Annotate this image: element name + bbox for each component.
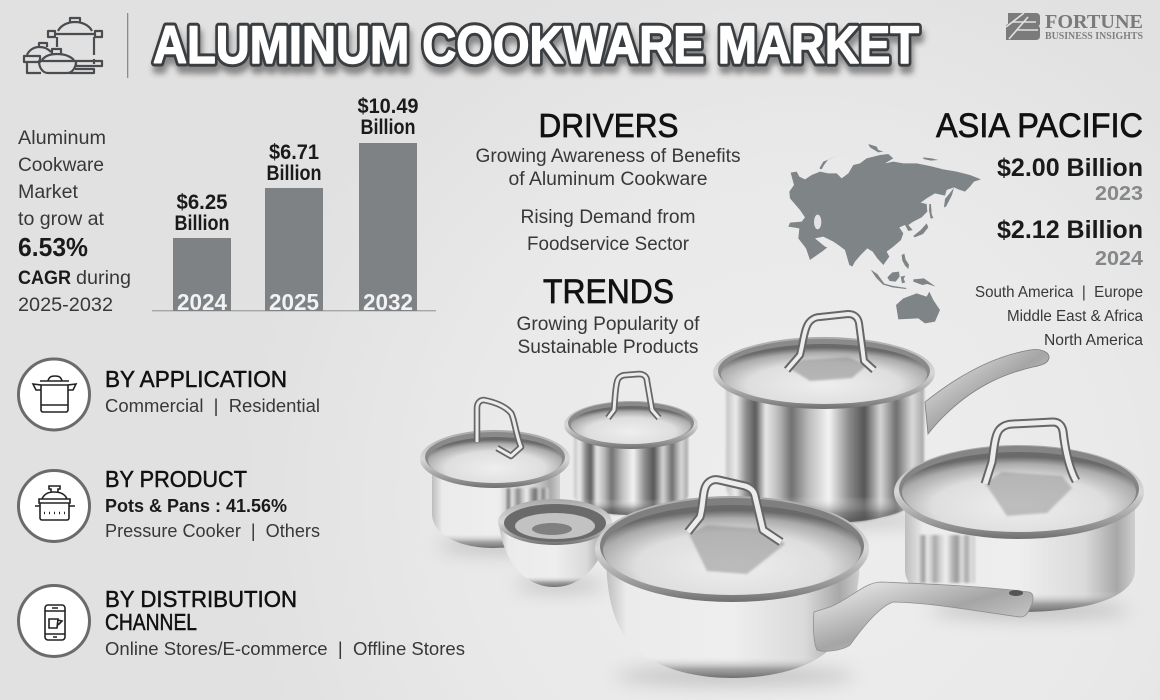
market growth text: Cookware [18, 154, 104, 176]
bar 2032: 2032 [363, 289, 413, 315]
bar chart: market size [152, 95, 436, 315]
logo: Fortune Business Insights: BUSINESS INSIGHTS [1045, 31, 1143, 42]
title: ALUMINUM COOKWARE MARKET [155, 23, 921, 82]
segment: by application: BY APPLICATION [105, 366, 287, 392]
logo: Fortune Business Insights: FORTUNE [1045, 11, 1143, 33]
right saucepan [894, 422, 1144, 612]
logo: Fortune Business Insights [1006, 11, 1143, 42]
front saucepan [595, 480, 1033, 678]
bar 2025: Billion [266, 162, 322, 185]
segment: by distribution channel: BY DISTRIBUTION [105, 586, 297, 612]
Asia Pacific figures: 2023 [1095, 183, 1143, 205]
map: Asia Pacific [788, 144, 981, 323]
left small pot [420, 400, 570, 548]
bar 2032: $10.49 [358, 95, 418, 118]
Asia Pacific figures: $2.00 Billion [997, 154, 1143, 182]
market growth text [18, 127, 131, 316]
drivers: of Aluminum Cookware [508, 169, 708, 190]
market growth text: CAGR [18, 267, 71, 289]
segment: by application: Commercial | Residential [105, 395, 320, 416]
Asia Pacific figures: South America | Europe [975, 284, 1143, 301]
cookware photo illustration [420, 314, 1144, 684]
header divider [127, 13, 128, 78]
bar 2024: $6.25 [176, 191, 228, 214]
drivers [476, 107, 740, 255]
segment: by distribution channel: CHANNEL [105, 609, 197, 635]
bar 2032: Billion [360, 116, 416, 139]
trends: TRENDS [543, 273, 674, 311]
trends [516, 273, 700, 358]
drivers: Rising Demand from [520, 207, 696, 228]
title: ALUMINUM COOKWARE MARKET [153, 16, 919, 75]
market growth text: Aluminum [18, 127, 106, 149]
Asia Pacific figures [936, 107, 1144, 349]
icon: stock pot [33, 376, 76, 412]
trends: Growing Popularity of [516, 314, 700, 335]
title: ALUMINUM COOKWARE MARKET [153, 16, 919, 75]
icon: casserole pot [35, 486, 75, 520]
bowl [498, 499, 612, 587]
bar 2025: $6.71 [269, 141, 319, 164]
segment: by distribution channel [18, 586, 465, 659]
Asia Pacific figures: Middle East & Africa [1007, 308, 1143, 325]
large saucepan [713, 314, 1049, 523]
market growth text: to grow at [18, 208, 105, 230]
floor shadows [438, 514, 1130, 684]
tall small pot [564, 374, 698, 515]
drivers: Growing Awareness of Benefits [476, 146, 740, 167]
icon: phone with kettle [45, 605, 65, 640]
bar 2025 [265, 141, 323, 315]
Asia Pacific figures: $2.12 Billion [997, 216, 1143, 244]
segment: by distribution channel: Online Stores/E-commerce | Offline Stores [105, 638, 465, 659]
bar 2024: 2024 [177, 289, 227, 315]
bar 2032 [358, 95, 418, 315]
segment: by product [18, 466, 320, 542]
drivers: Foodservice Sector [527, 234, 690, 255]
segment: by product: Pressure Cooker | Others [105, 520, 320, 541]
market growth text: 6.53% [18, 232, 88, 262]
bar 2024 [173, 191, 231, 315]
bar 2025: 2025 [269, 289, 319, 315]
segment: by product: Pots & Pans : 41.56% [105, 496, 287, 516]
Asia Pacific figures: 2024 [1095, 248, 1144, 270]
trends: Sustainable Products [518, 337, 698, 358]
market growth text: during [76, 267, 131, 289]
header icon: cookware set [24, 18, 102, 73]
segment: by application [18, 359, 320, 430]
Asia Pacific figures: North America [1044, 332, 1143, 349]
Asia Pacific figures: ASIA PACIFIC [936, 107, 1143, 145]
market growth text: 2025-2032 [18, 294, 113, 316]
market growth text: Market [18, 181, 79, 203]
drivers: DRIVERS [538, 107, 678, 144]
segment: by product: BY PRODUCT [105, 466, 247, 492]
bar 2024: Billion [174, 212, 230, 235]
